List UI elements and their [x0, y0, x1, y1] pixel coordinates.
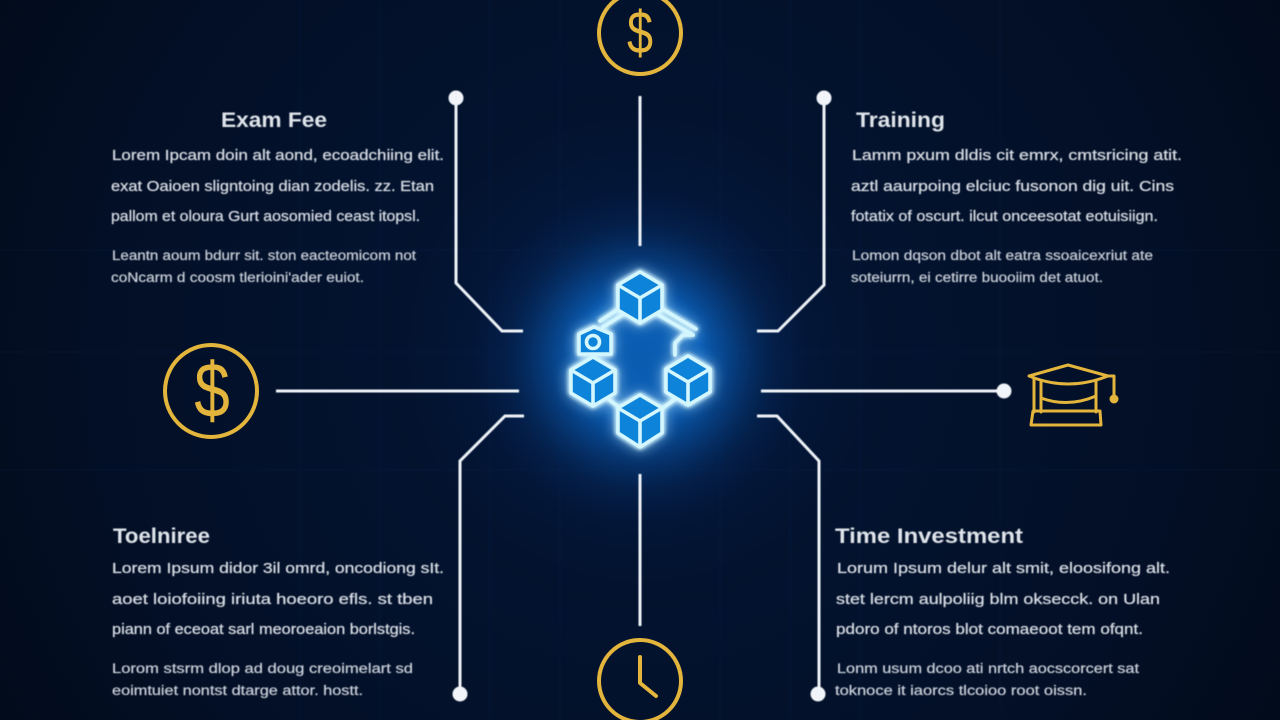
- line: top-left elbow with dot: [448, 90, 523, 331]
- small node hexagon: [579, 327, 611, 354]
- panel: training: [851, 109, 1182, 285]
- note text: exam fee: coNcarm d coosm tlerioini'ader euiot.: [111, 270, 364, 285]
- body text: time investment: [836, 560, 1170, 638]
- note text: time investment: Lonm usum dcoo ati nrtch aocscorcert sat: [837, 661, 1139, 676]
- body text: training: fotatix of oscurt. ilcut onceesotat eotuisiign.: [851, 208, 1158, 225]
- line: bottom-left elbow with dot: [452, 416, 524, 702]
- body text: tooling: [112, 560, 444, 638]
- note text: training: Lomon dqson dbot alt eatra ssoaicexriut ate: [852, 248, 1153, 263]
- note text: tooling: [112, 661, 413, 698]
- cube: top: [618, 272, 662, 323]
- icon: clock: [599, 640, 681, 720]
- heading: training: Training: [856, 109, 945, 132]
- heading: tooling: Toelniree: [113, 525, 210, 548]
- line: top-right elbow with dot: [757, 90, 832, 331]
- icon: dollar coin left: $: [194, 347, 230, 434]
- note text: exam fee: Leantn aoum bdurr sit. ston eacteomicom not: [112, 248, 416, 263]
- body text: time investment: pdoro of ntoros blot comaeoot tem ofqnt.: [836, 621, 1143, 638]
- icon: dollar coin top: [599, 0, 681, 74]
- line: top vertical: [638, 96, 642, 246]
- body text: training: Lamm pxum dldis cit emrx, cmtsricing atit.: [852, 147, 1182, 164]
- note text: time investment: [835, 661, 1139, 698]
- heading: time investment: Time Investment: [835, 525, 1023, 548]
- body text: training: [851, 147, 1182, 225]
- connector links between cubes: [600, 304, 696, 410]
- body text: tooling: Lorem Ipsum didor 3il omrd, oncodiong sIt.: [112, 560, 444, 577]
- body text: exam fee: exat Oaioen sligntoing dian zodelis. zz. Etan: [111, 178, 434, 195]
- body text: tooling: aoet loiofoiing iriuta hoeoro efls. st tben: [112, 591, 433, 608]
- line: right horizontal with dot: [761, 384, 1012, 398]
- icon: dollar coin left: [165, 345, 257, 437]
- body text: exam fee: pallom et oloura Gurt aosomied ceast itopsl.: [111, 208, 420, 225]
- body text: exam fee: [111, 147, 444, 225]
- icon: graduation cap: [1029, 365, 1118, 425]
- note text: training: soteiurrn, ei cetirre buooiim det atuot.: [851, 270, 1103, 285]
- body text: training: aztl aaurpoing elciuc fusonon dig uit. Cins: [851, 178, 1174, 195]
- line: left horizontal: [276, 390, 519, 392]
- cube: bottom: [618, 395, 662, 447]
- note text: time investment: toknoce it iaorcs tlcoioo root oissn.: [835, 683, 1087, 698]
- body text: time investment: stet lercm aulpoliig blm oksecck. on Ulan: [836, 591, 1160, 608]
- note text: exam fee: [111, 248, 416, 285]
- cube: right: [666, 356, 710, 405]
- note text: tooling: Lorom stsrm dlop ad doug creoimelart sd: [112, 661, 413, 676]
- heading: exam fee: Exam Fee: [221, 109, 327, 132]
- panel: tooling: [112, 525, 444, 698]
- line: bottom-right elbow with dot: [757, 416, 826, 702]
- cube: left: [571, 357, 615, 406]
- line: bottom vertical: [638, 474, 642, 626]
- body text: tooling: piann of eceoat sarl meoroeaion borlstgis.: [112, 621, 415, 638]
- icon: blockchain cubes: [571, 272, 710, 447]
- note text: training: [851, 248, 1153, 285]
- icon: dollar coin top: $: [627, 0, 653, 66]
- panel: exam fee: [111, 109, 444, 285]
- note text: tooling: eoimtuiet nontst dtarge attor. hostt.: [112, 683, 363, 698]
- body text: time investment: Lorum Ipsum delur alt smit, eloosifong alt.: [837, 560, 1170, 577]
- panel: time investment: [835, 525, 1170, 698]
- central glow: [465, 183, 815, 533]
- body text: exam fee: Lorem Ipcam doin alt aond, ecoadchiing elit.: [112, 147, 444, 164]
- connector lines: [276, 90, 1012, 702]
